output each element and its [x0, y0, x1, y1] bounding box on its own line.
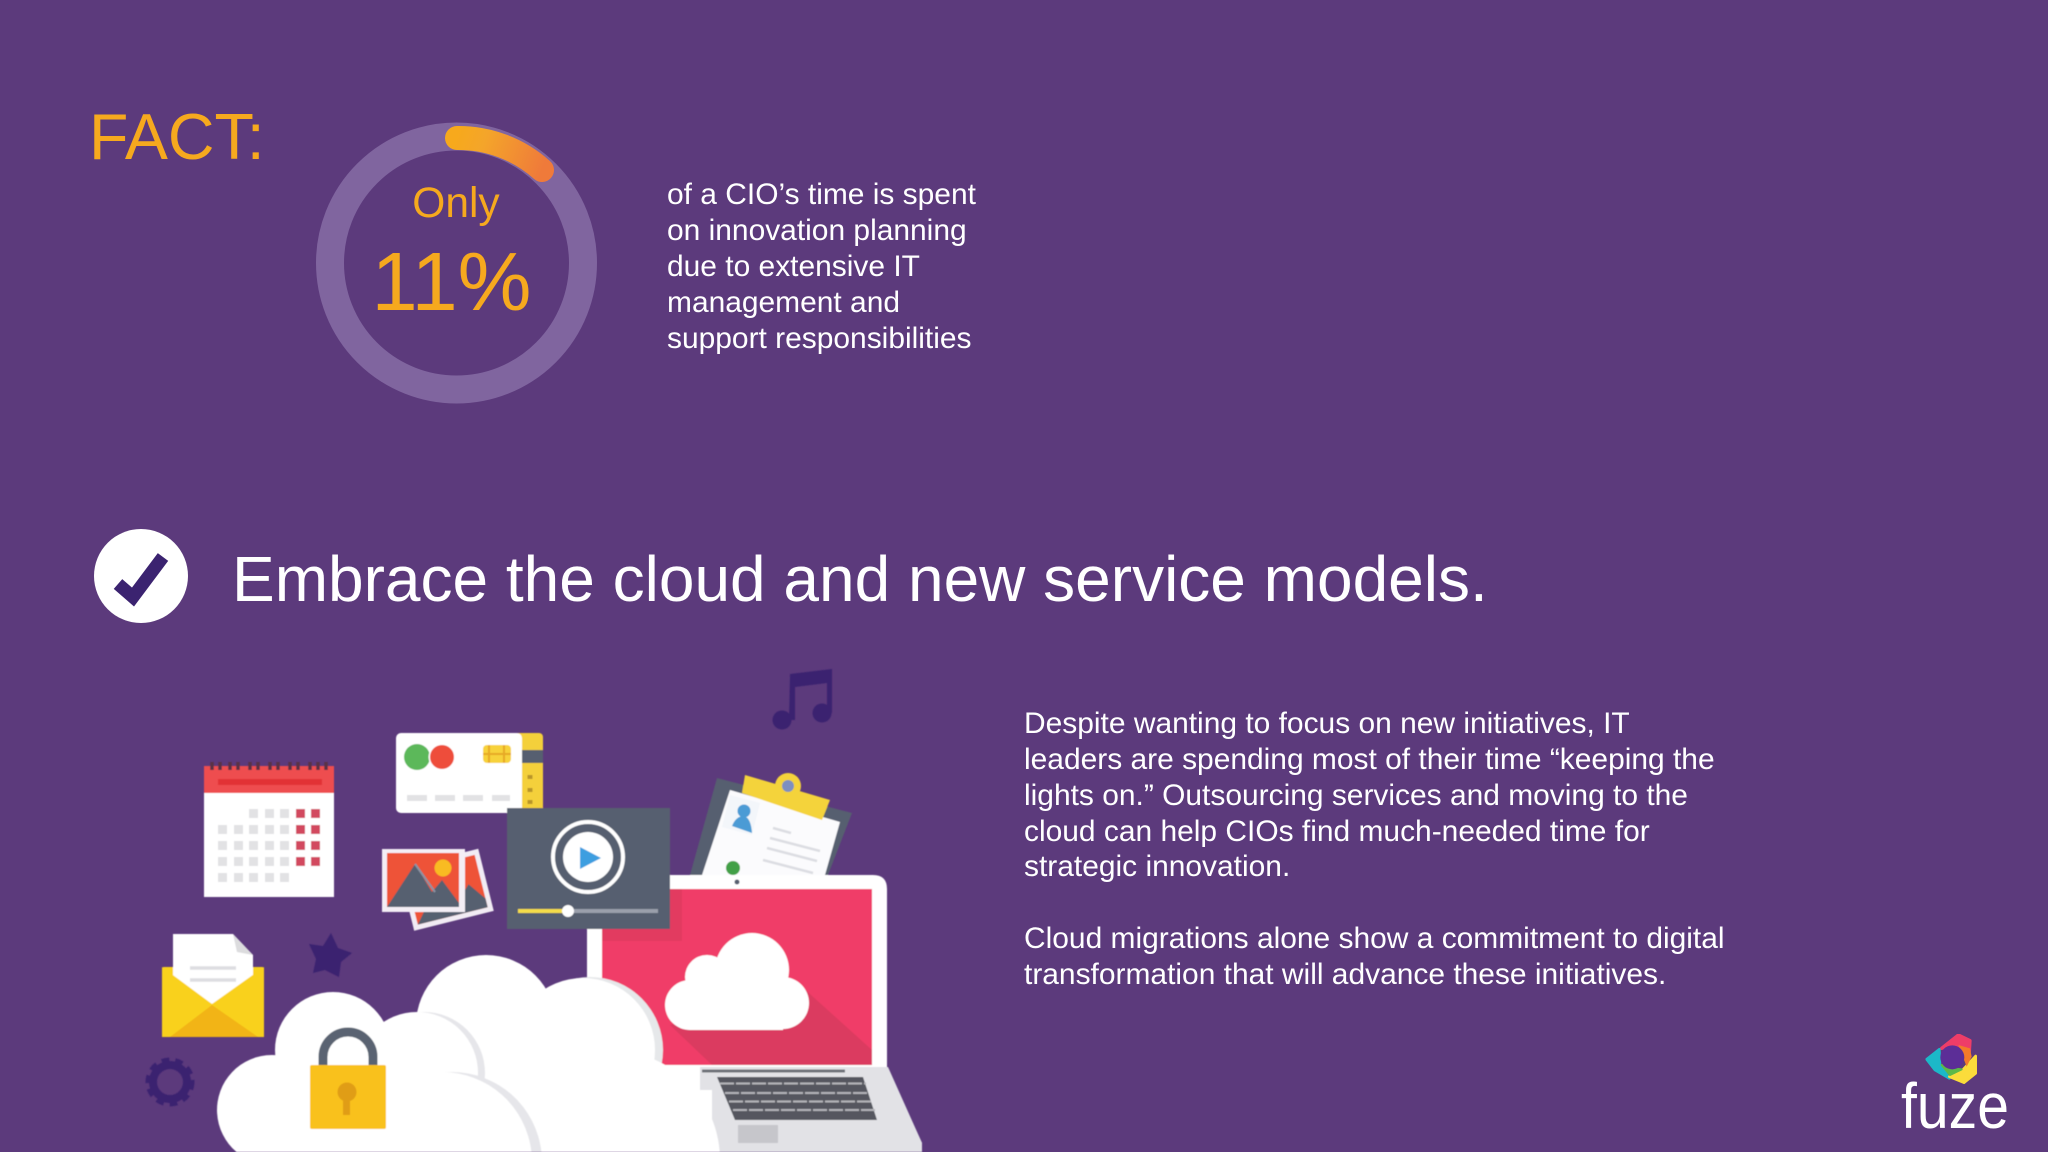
text block: cloud explanation: transformation that will advance these initiatives. [1024, 958, 1666, 991]
text block: cloud explanation: lights on.” Outsourcing services and moving to the [1024, 779, 1688, 812]
logo: fuze [1901, 1035, 2009, 1142]
logo wordmark: fuze [1901, 1070, 2009, 1142]
icon: music note [772, 669, 832, 730]
laptop screen cloud [665, 933, 809, 1030]
text block: fact description: on innovation planning [667, 214, 967, 247]
icon: gear [148, 1060, 192, 1104]
text block: cloud explanation: cloud can help CIOs find much-needed time for [1024, 815, 1650, 848]
text block: cloud explanation [1024, 707, 1725, 991]
text block: fact description: due to extensive IT [667, 250, 920, 283]
heading: FACT: FACT: [89, 101, 265, 173]
icon: laptop [587, 875, 922, 1152]
illustration: cloud services [148, 669, 922, 1152]
icon: star [309, 933, 352, 977]
logo mark [1927, 1035, 1976, 1083]
icon: padlock [310, 1032, 386, 1129]
icon: calendar [204, 762, 334, 897]
icon: check mark [94, 529, 188, 623]
icon: video player [507, 808, 670, 929]
text block: cloud explanation: leaders are spending most of their time “keeping the [1024, 743, 1715, 776]
donut chart: 11 percent [330, 136, 583, 390]
laptop cloud shadow [670, 985, 872, 1065]
laptop keyboard [717, 1077, 877, 1120]
video player shadow on screen [602, 889, 682, 941]
donut progress arc [457, 138, 542, 170]
text block: fact description [667, 178, 977, 355]
text block: cloud explanation: Despite wanting to focus on new initiatives, IT [1024, 707, 1630, 740]
text block: cloud explanation: strategic innovation. [1024, 850, 1290, 883]
heading: embrace the cloud: Embrace the cloud and new service models. [232, 543, 1488, 615]
text block: cloud explanation: Cloud migrations alone show a commitment to digital [1024, 922, 1725, 955]
icon: photos [382, 849, 494, 931]
icon: credit card [396, 733, 543, 813]
icon: envelope with letter [162, 934, 264, 1037]
text block: fact description: management and [667, 286, 900, 319]
text block: fact description: support responsibilities [667, 322, 972, 355]
donut label: Only: Only [412, 180, 500, 227]
text block: fact description: of a CIO’s time is spent [667, 178, 977, 211]
large cloud [217, 955, 720, 1152]
icon: clipboard [690, 773, 852, 875]
donut value: 11%: 11% [372, 235, 531, 328]
